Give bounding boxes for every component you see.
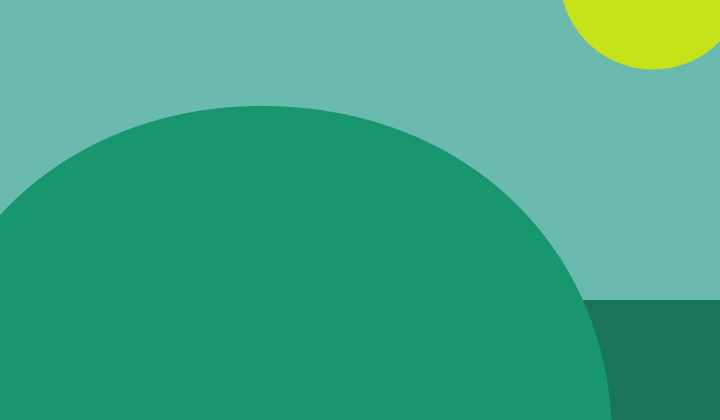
large green hill — [0, 106, 612, 420]
dark green ground band — [0, 300, 720, 420]
lime sun circle — [560, 0, 720, 70]
